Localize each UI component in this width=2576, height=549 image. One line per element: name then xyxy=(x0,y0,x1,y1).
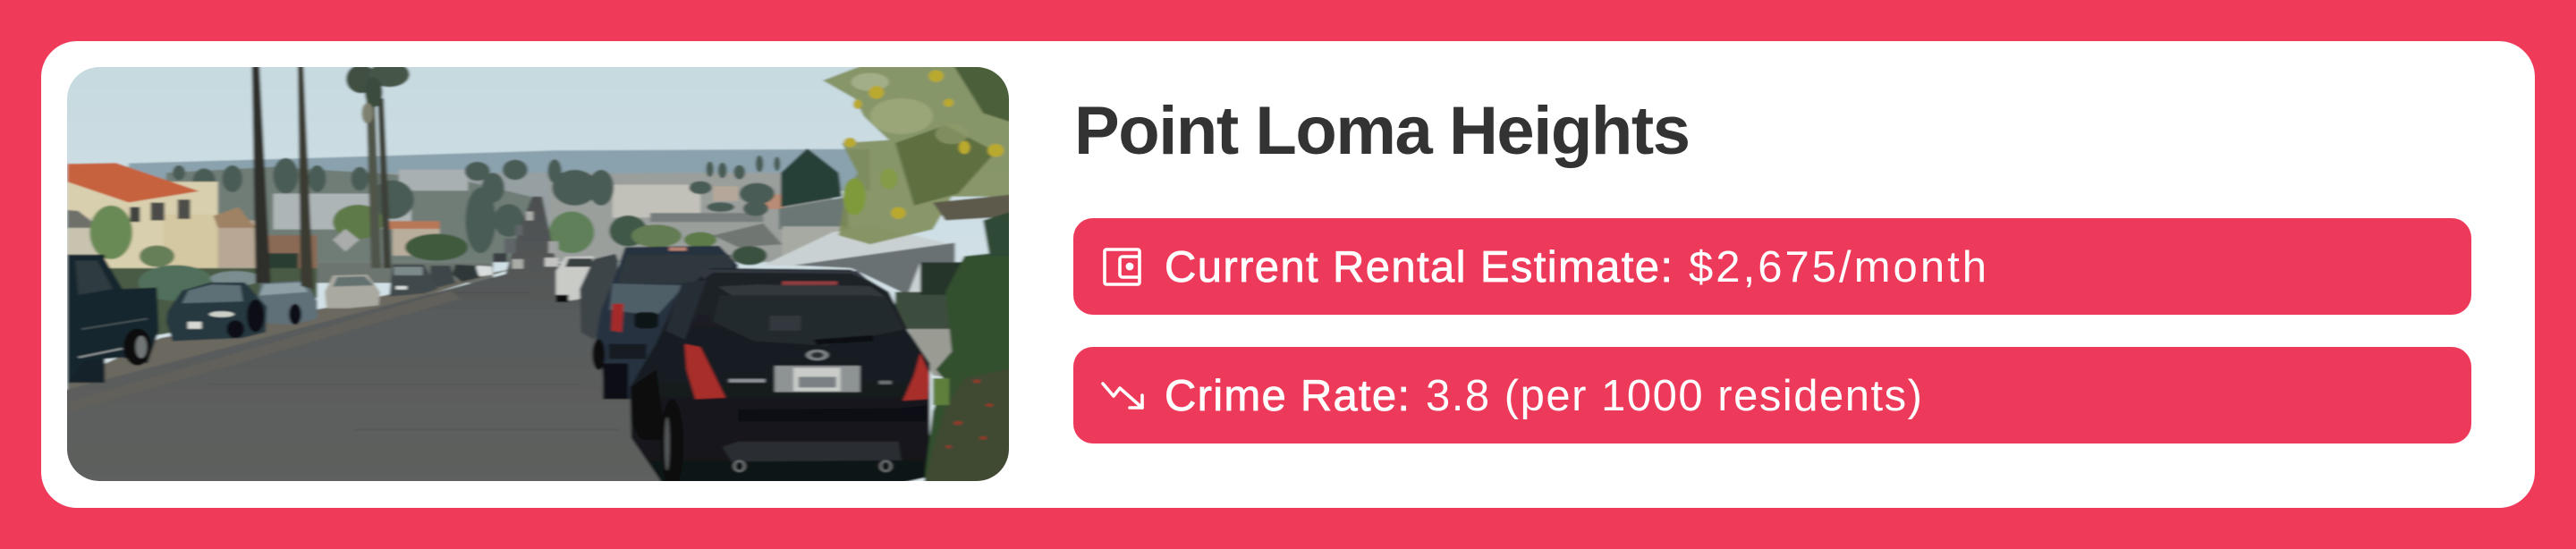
crime label: Crime Rate: xyxy=(1165,372,1410,420)
distant cars xyxy=(493,212,558,269)
far palms and trees xyxy=(173,156,780,253)
right bushes xyxy=(923,252,1009,481)
sidewalk xyxy=(67,269,509,390)
title: Point Loma Heights xyxy=(1074,93,1690,169)
yellow flowering tree xyxy=(823,63,1021,257)
icon: trending down arrow xyxy=(1103,384,1142,408)
white pickup xyxy=(556,257,594,301)
icon: wallet xyxy=(1105,249,1140,284)
left lawn xyxy=(110,268,318,336)
rental value: $2,675/month xyxy=(1689,243,1987,291)
tall palm trunks xyxy=(252,62,410,289)
foreground black SUV xyxy=(630,268,929,488)
rental estimate bar xyxy=(1073,218,2471,315)
left row of parked cars xyxy=(67,255,493,384)
dark cypress xyxy=(781,148,842,207)
street photo xyxy=(67,67,1009,481)
right background: tent, yard xyxy=(765,231,946,292)
crime value: 3.8 (per 1000 residents) xyxy=(1426,372,1922,420)
road xyxy=(67,196,664,481)
left houses xyxy=(67,182,218,274)
rental label: Current Rental Estimate: xyxy=(1165,243,1673,291)
crime rate bar xyxy=(1073,347,2471,443)
dark blue pickup xyxy=(592,246,738,399)
